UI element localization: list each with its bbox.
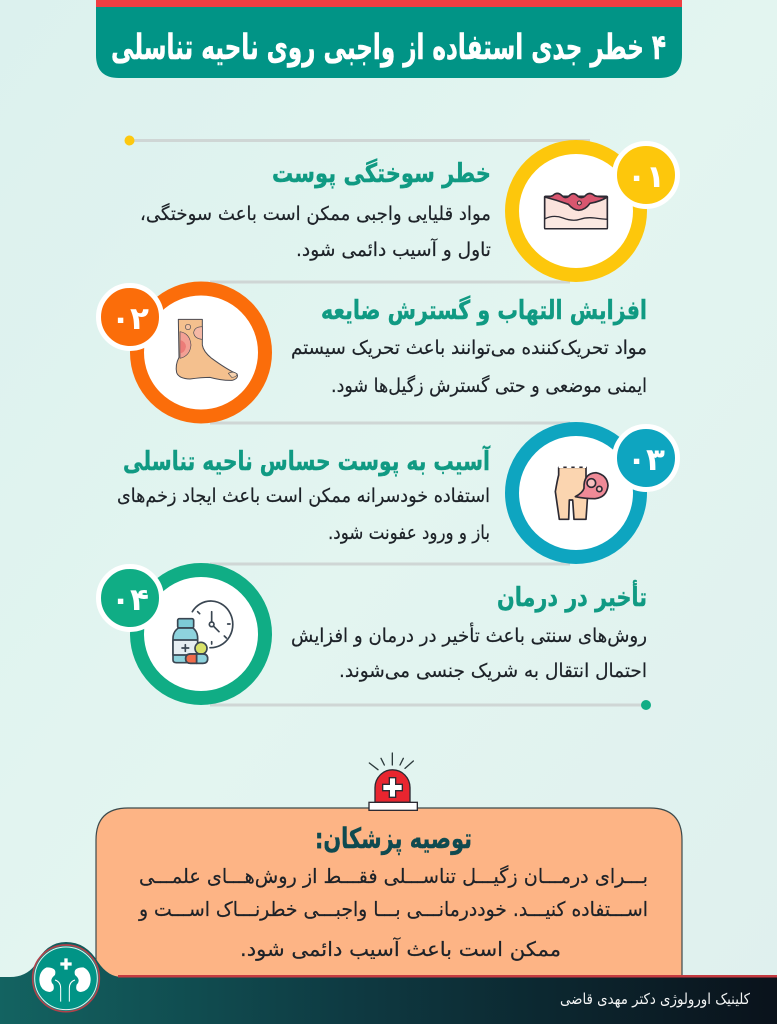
start dot bbox=[124, 136, 134, 146]
header banner bbox=[96, 0, 682, 78]
body 1: مواد قلیایی واجبی ممکن است باعث سوختگی، bbox=[140, 202, 491, 225]
heading 2: افزایش التهاب و گسترش ضایعه bbox=[321, 295, 647, 326]
ring 3 bbox=[512, 429, 640, 557]
panel: item 4 treatment delay bbox=[98, 566, 647, 698]
logo bbox=[33, 945, 99, 1012]
clinic name: کلینیک اورولوژی دکتر مهدی قاضی bbox=[560, 990, 751, 1008]
advice box bbox=[96, 808, 682, 980]
body 3 bbox=[117, 485, 490, 544]
icon: hips with lesion bbox=[555, 467, 608, 519]
panel: item 2 inflammation bbox=[98, 286, 647, 416]
advice body: بـــرای درمـــان زگیـــل تناســـلی فقـــط از روش‌هـــای علمـــی bbox=[139, 864, 648, 888]
icon: foot bbox=[176, 319, 237, 380]
panel: doctors' advice bbox=[96, 753, 682, 980]
body 2 bbox=[291, 337, 647, 397]
panel: item 1 skin burn bbox=[140, 144, 678, 275]
badge 04: ۰۴ bbox=[111, 582, 149, 618]
heading 4: تأخیر در درمان bbox=[497, 580, 647, 613]
badge 04 bbox=[98, 566, 162, 630]
body 3: باز و ورود عفونت شود. bbox=[328, 522, 490, 544]
advice heading: توصیه پزشکان: bbox=[315, 822, 472, 855]
heading 3: آسیب به پوست حساس ناحیه تناسلی bbox=[123, 445, 491, 477]
advice body: اســـتفاده کنیـــد. خوددرمانـــی بـــا واجبـــی خطرنـــاک اســـت و bbox=[138, 897, 648, 921]
icon: clock and medicine bbox=[173, 601, 233, 663]
badge 01 bbox=[614, 144, 678, 206]
body 2: مواد تحریک‌کننده می‌توانند باعث تحریک سیستم bbox=[291, 337, 647, 359]
body 4 bbox=[291, 622, 647, 682]
body 1 bbox=[140, 202, 491, 261]
body 1: تاول و آسیب دائمی شود. bbox=[296, 237, 491, 261]
badge 02: ۰۲ bbox=[111, 301, 149, 337]
body 2: ایمنی موضعی و حتی گسترش زگیل‌ها شود. bbox=[331, 374, 647, 397]
footer bar bbox=[0, 942, 777, 1024]
badge 03: ۰۳ bbox=[627, 442, 665, 478]
divider lines bbox=[130, 140, 645, 705]
icon: siren bbox=[369, 753, 417, 810]
panel: item 3 sensitive skin bbox=[117, 426, 678, 557]
badge 01: ۰۱ bbox=[627, 159, 665, 195]
ring 1 bbox=[512, 147, 640, 275]
end dot bbox=[641, 700, 651, 710]
body 4: روش‌های سنتی باعث تأخیر در درمان و افزایش bbox=[291, 622, 647, 647]
badge 03 bbox=[614, 426, 678, 490]
ring 2 bbox=[137, 288, 265, 416]
body 4: احتمال انتقال به شریک جنسی می‌شوند. bbox=[339, 660, 647, 682]
ring 4 bbox=[137, 570, 265, 698]
advice body: ممکن است باعث آسیب دائمی شود. bbox=[240, 936, 561, 961]
heading 1: خطر سوختگی پوست bbox=[272, 158, 491, 189]
badge 02 bbox=[98, 286, 162, 348]
icon: burned skin bbox=[545, 193, 607, 229]
body 3: استفاده خودسرانه ممکن است باعث ایجاد زخم‌های bbox=[117, 485, 490, 507]
advice body bbox=[138, 864, 648, 961]
